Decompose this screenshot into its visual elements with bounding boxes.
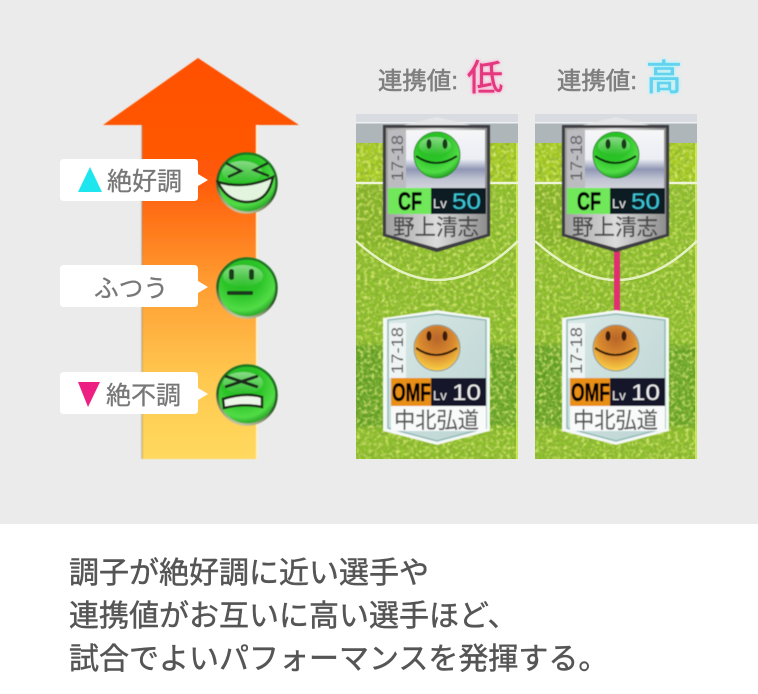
link line — [614, 250, 620, 312]
card: 野上清志: CF — [577, 188, 601, 216]
caption text: 調子が絶好調に近い選手や — [69, 557, 429, 590]
heading: 連携値 低: 低 — [467, 57, 503, 98]
heading: 連携値 低: 連携値: — [378, 68, 458, 95]
card: 中北弘道: 10 — [452, 380, 481, 405]
panel: high link — [529, 114, 706, 459]
card: 野上清志: Lv — [433, 196, 447, 211]
card: 野上清志 — [383, 117, 490, 252]
icon: neutral face — [218, 258, 276, 318]
card: 野上清志: 17-18 — [388, 135, 407, 181]
label: ふつう — [60, 265, 208, 307]
heading: 連携値 高: 高 — [646, 57, 682, 98]
card: 中北弘道: 17-18 — [567, 327, 586, 374]
icon: laughing face — [218, 154, 276, 212]
card: 野上清志: CF — [398, 188, 422, 216]
card: 中北弘道: 10 — [631, 380, 660, 405]
card: 中北弘道: 中北弘道 — [394, 408, 479, 433]
card: 中北弘道: 17-18 — [388, 327, 407, 374]
card: 野上清志: 50 — [452, 189, 481, 214]
text: 絶不調: 絶不調 — [106, 382, 181, 410]
caption text: 連携値がお互いに高い選手ほど、 — [69, 600, 518, 633]
heading: 連携値 高: 高 — [646, 57, 682, 98]
card: 中北弘道: Lv — [433, 388, 447, 403]
text: 絶好調: 絶好調 — [107, 168, 182, 196]
panel: low link — [350, 114, 527, 459]
text: ふつう: ふつう — [94, 275, 168, 303]
card: 中北弘道: Lv — [612, 388, 626, 403]
card: 中北弘道: OMF — [392, 379, 431, 407]
heading: 連携値 低: 低 — [467, 57, 503, 98]
arrow — [103, 58, 299, 459]
label: 絶不調 — [60, 372, 208, 414]
pitch — [350, 114, 527, 459]
card: 野上清志: 50 — [631, 189, 660, 214]
caption text: 試合でよいパフォーマンスを発揮する。 — [69, 643, 608, 676]
heading: 連携値 高 — [557, 57, 682, 98]
card: 中北弘道: 中北弘道 — [573, 408, 658, 433]
card: 野上清志 — [562, 117, 669, 252]
card: 中北弘道: OMF — [571, 379, 610, 407]
card: 野上清志: 17-18 — [567, 135, 586, 181]
label: 絶好調 — [60, 159, 208, 201]
card: 野上清志: 野上清志 — [393, 215, 479, 240]
card: 中北弘道 — [383, 310, 490, 445]
icon: pink down triangle — [78, 382, 100, 407]
heading: 連携値 高: 連携値: — [557, 68, 637, 95]
caption text — [69, 557, 608, 676]
card: 中北弘道 — [562, 310, 669, 445]
card: 野上清志: Lv — [612, 196, 626, 211]
pitch — [529, 114, 706, 459]
white text band — [0, 524, 758, 694]
icon: cyan up triangle — [78, 167, 102, 192]
card: 野上清志: 野上清志 — [572, 215, 658, 240]
heading: 連携値 低 — [378, 57, 503, 98]
icon: grimacing face — [218, 366, 276, 424]
